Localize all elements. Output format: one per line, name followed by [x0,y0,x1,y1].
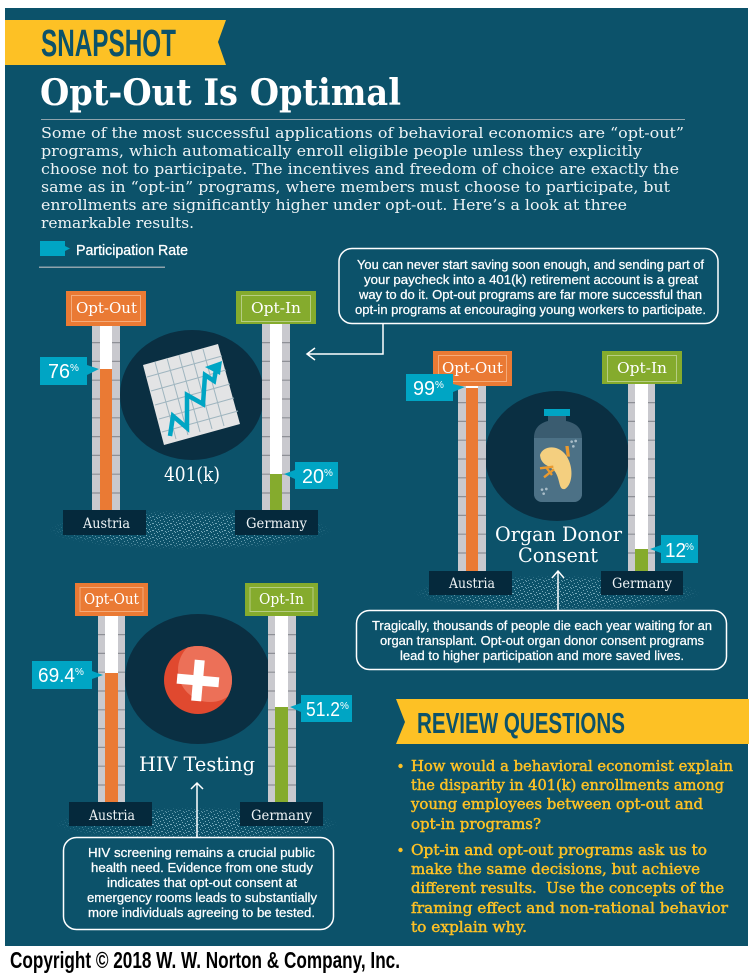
label: Germany: Germany [612,576,672,592]
label: Austria [69,802,152,826]
question 1: young employees between opt-out and [410,797,703,813]
question 1: How would a behavioral economist explain [411,759,733,775]
value: 76% [40,357,99,385]
value: 12%: % [685,542,694,553]
callout: HIV testing: more individuals agreeing to be tested. [88,905,315,920]
intro text block: enrollments are significantly higher under opt-out. Here’s a look at three [41,196,627,214]
thermometer: organ opt-out Austria 99% [458,386,486,571]
ground shadow: organ donor [413,575,701,611]
tag: opt-in: Opt-In [251,299,301,317]
value: 20%: 20 [302,466,324,488]
ground shadow: HIV testing [59,808,334,837]
intro text block: programs, which automatically enroll eligible people unless they explicitly [41,142,643,160]
thermometer: 401(k) opt-in Germany 20% [262,324,290,510]
question 1 [398,759,733,833]
callout: organ donor: Tragically, thousands of people die each year waiting for an [372,618,712,633]
question 2: to explain why. [411,920,527,936]
tag: opt-in [236,291,316,324]
callout: organ donor: organ transplant. Opt-out organ donor consent programs [380,633,704,648]
blob: organ donor [485,391,629,521]
callout: HIV testing: indicates that opt-out consent at [107,875,297,890]
callout: HIV testing: emergency rooms leads to substantially [87,890,317,905]
label: Austria: Austria [82,516,130,532]
icon: medical cross [164,646,232,714]
value: 76%: % [70,363,79,374]
value: 51.2%: 51.2 [306,699,340,721]
thermometer: HIV opt-in Germany 51.2% [268,614,296,802]
callout: 401(k): You can never start saving soon enough, and sending part of [357,257,704,272]
callout: HIV testing [64,838,334,930]
icon: kidney in a jar [534,409,582,502]
tag: opt-in [602,351,682,384]
value: 12%: 12 [665,540,686,562]
legend: participation rate: Participation Rate [76,242,188,259]
banner: snapshot: SNAPSHOT [41,23,176,65]
chart title: organ donor consent: Consent [518,543,598,567]
title: Opt-Out Is Optimal [40,72,401,114]
callout: 401(k) [339,248,718,324]
tag: opt-out: Opt-Out [76,299,137,317]
blob: 401(k) [120,330,264,460]
value: 99% [406,374,465,401]
tag: opt-out: Opt-Out [442,359,503,377]
ground shadow: 401(k) [48,510,332,550]
label: Austria: Austria [88,808,135,824]
thermometer: 401(k) opt-out Austria 76% [92,326,120,510]
value: 69.4% [32,661,103,689]
blob: HIV testing [125,614,271,744]
intro text block: remarkable results. [41,214,194,232]
chart title: organ donor consent [495,522,622,567]
label: Germany [240,802,323,826]
icon: chart paper with rising arrow [143,344,240,445]
label: Austria: Austria [448,576,495,592]
arrow: callout to 401(k) [307,324,383,360]
tag: opt-out [66,291,146,326]
label: Germany [601,571,683,595]
value: 20% [284,462,338,489]
value: 69.4%: 69.4 [38,665,75,687]
value: 99%: 99 [413,378,435,400]
callout: 401(k): way to do it. Opt-out programs are far more successful than [358,287,702,302]
banner: review questions: REVIEW QUESTIONS [417,708,625,740]
banner: review questions [396,699,749,744]
arrow: callout to organ donor [552,571,564,610]
label: Austria [63,510,146,535]
question 2: Opt-in and opt-out programs ask us to [411,843,707,859]
callout: 401(k): opt-in programs at encouraging young workers to participate. [355,302,706,317]
intro text block: Some of the most successful applications of behavioral economics are “opt-out” [41,124,684,142]
chart title: organ donor consent: Organ Donor [495,522,622,546]
callout: HIV testing: HIV screening remains a crucial public [88,845,315,860]
value: 20%: % [324,468,333,479]
value: 51.2% [290,695,352,722]
value: 69.4%: % [75,667,84,678]
question 1: opt-in programs? [411,817,541,833]
question 1: the disparity in 401(k) enrollments among [411,778,724,794]
tag: opt-out [433,351,512,386]
tag: opt-in: Opt-In [259,590,304,608]
thermometer: organ opt-in Germany 12% [628,384,655,571]
intro text block: same as in “opt-in” programs, where members must choose to participate, but [41,178,670,196]
question 2 [398,843,728,936]
thermometer: HIV opt-out Austria 69.4% [98,616,125,802]
label: Germany: Germany [246,516,307,532]
value: 99%: % [435,380,444,391]
chart title: HIV testing: HIV Testing [139,752,255,776]
intro text block [41,124,684,232]
question 2: make the same decisions, but achieve [411,862,700,878]
label: Germany [235,510,318,535]
value: 76%: 76 [48,361,70,383]
arrow: callout to HIV testing [191,783,203,837]
tag: opt-in [245,583,318,616]
copyright: Copyright © 2018 W. W. Norton & Company, Inc. [10,947,400,973]
question 2: different results. Use the concepts of the [411,881,724,897]
tag: opt-in: Opt-In [617,359,667,377]
label: Germany: Germany [251,808,312,824]
callout: HIV testing: health need. Evidence from one study [91,860,313,875]
label: Austria [429,571,512,595]
legend: participation rate [40,241,188,259]
value: 51.2%: % [340,701,349,712]
tag: opt-out: Opt-Out [84,590,139,608]
callout: organ donor: lead to higher participation and more saved lives. [400,648,684,663]
callout: organ donor [356,610,726,670]
chart title: 401(k): 401(k) [164,462,220,486]
callout: 401(k): your paycheck into a 401(k) retirement account is a great [364,272,698,287]
tag: opt-out [75,583,148,616]
question 2: framing effect and non-rational behavior [411,901,728,917]
value: 12% [650,535,698,563]
intro text block: choose not to participate. The incentives and freedom of choice are exactly the [41,160,679,178]
